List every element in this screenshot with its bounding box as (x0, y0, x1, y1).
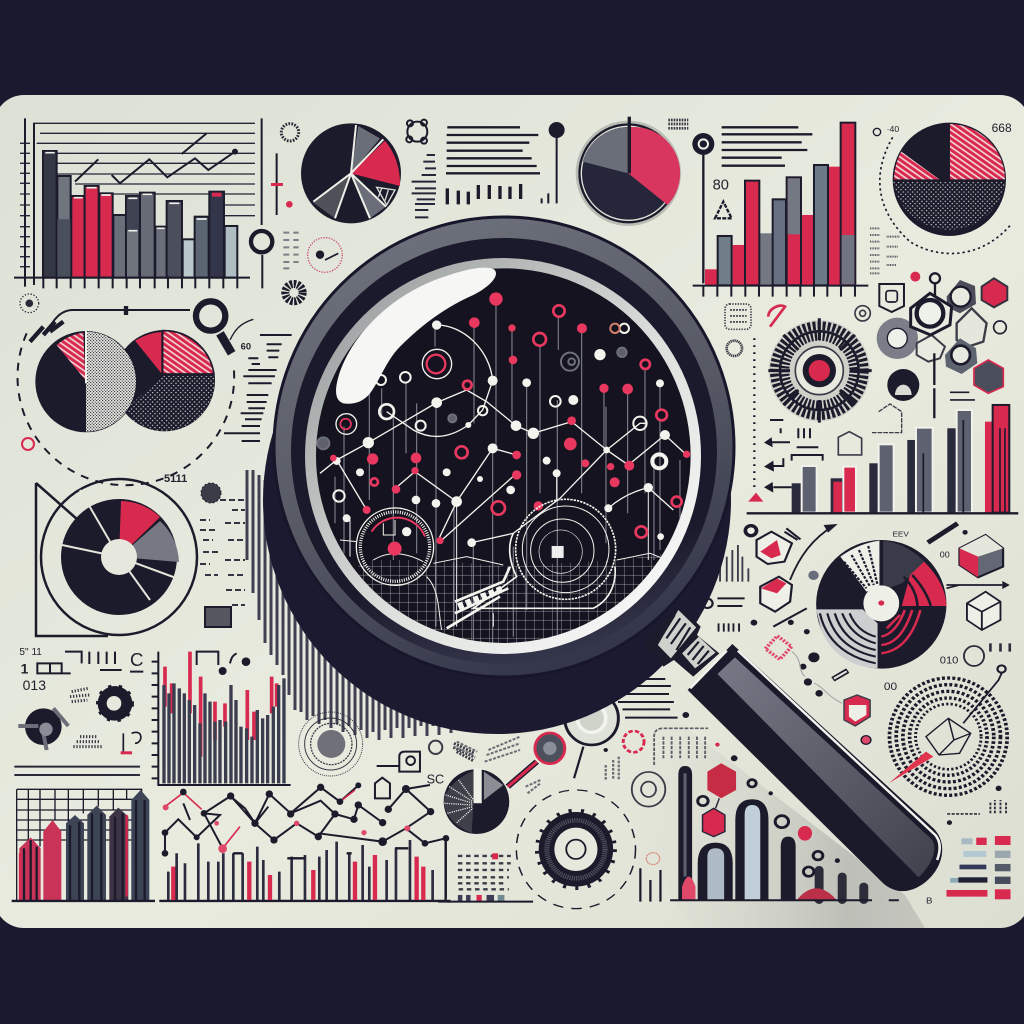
dashed circle (18, 333, 234, 485)
gear core (803, 354, 836, 387)
curve lower left (427, 577, 442, 630)
pie gray slice (351, 126, 380, 173)
small icons (375, 741, 442, 798)
white centre (863, 585, 899, 621)
pie: dial (576, 117, 681, 226)
right gauge (473, 499, 616, 608)
ringed pink nodes (371, 305, 682, 538)
base rule (12, 897, 451, 904)
double rule (14, 767, 140, 775)
pink circle (646, 853, 660, 865)
small label: 60 (241, 341, 251, 351)
list lines (446, 127, 540, 173)
small magnifier icon (196, 301, 253, 353)
pie lower-left gray (313, 173, 351, 218)
red diamond (748, 493, 763, 502)
gauge red arc (372, 518, 425, 537)
virus icon (285, 284, 303, 301)
pie notch (474, 768, 482, 803)
top-left marks (37, 652, 143, 673)
panel: top-left charts and pies (14, 118, 303, 485)
outline hex (957, 308, 987, 347)
red cube (959, 535, 1003, 577)
target rings (336, 349, 452, 434)
label 80: 80 (713, 177, 729, 193)
pie connector (50, 310, 190, 327)
pin (542, 122, 565, 203)
bar chart: monthly bars (43, 151, 237, 278)
red sector (135, 332, 161, 373)
axes (14, 118, 250, 288)
bar chart: lower right (747, 392, 1018, 513)
small red dot (715, 743, 720, 747)
lower left stripes (816, 609, 878, 668)
capsule bars (678, 763, 864, 900)
panel: lower-right details (438, 523, 1011, 909)
white rings (333, 324, 666, 502)
mini matrix (458, 856, 511, 889)
red connector fill (508, 762, 537, 787)
tall capsule inner (681, 773, 689, 877)
caption lines (950, 392, 975, 400)
connector node (30, 306, 126, 342)
dot (996, 786, 1002, 791)
pie hatched slice (377, 187, 395, 205)
dark spikes (164, 678, 284, 783)
small ring (994, 321, 1006, 334)
magnifier: white glass rim (305, 258, 701, 654)
labels: EEV (892, 530, 910, 539)
lens badge (565, 692, 618, 778)
icon: house two (872, 404, 902, 433)
table top right (668, 120, 688, 128)
capsule mid (698, 843, 733, 900)
dotted vertical (751, 338, 758, 490)
dashed arc (880, 137, 1011, 253)
labels top right (873, 121, 1012, 136)
tape marks (458, 588, 503, 607)
gray bars (802, 410, 972, 513)
dial red sector (628, 127, 680, 205)
red bars (833, 405, 1009, 513)
pink ring (861, 736, 871, 744)
legend blocks (946, 836, 1011, 899)
tiny text block (870, 228, 900, 273)
handle collar (643, 605, 719, 677)
main hole (917, 300, 943, 327)
handle gray strip (717, 657, 934, 877)
small round icon (20, 294, 39, 313)
stems (335, 300, 680, 643)
outline cube (967, 592, 1000, 630)
labels top right: ·40 (887, 124, 899, 134)
teardrop pin (930, 273, 940, 418)
tiny table (283, 233, 299, 268)
labels (884, 530, 959, 693)
pie lower (444, 768, 509, 834)
gear wheel (539, 812, 613, 887)
icon: house (838, 432, 862, 455)
red sector (902, 562, 946, 606)
dial gray sector (583, 127, 628, 173)
dots (603, 712, 840, 863)
network nodes (162, 782, 449, 857)
dotted red inner (317, 251, 338, 260)
dial pie (61, 499, 177, 615)
bottom right hex (974, 360, 1003, 393)
small diamonds (764, 437, 774, 493)
gear red (809, 360, 830, 381)
dotted lower sector (127, 376, 215, 431)
panel: lower-left charts (12, 647, 475, 901)
red bulb (682, 877, 695, 900)
main trend lines (320, 325, 687, 543)
gear dashed orbit (516, 790, 636, 909)
red hatch tile (765, 636, 792, 659)
needle (963, 672, 1002, 723)
gauge red node (388, 542, 402, 556)
base axis (693, 286, 868, 297)
top-left labels: C (130, 649, 143, 670)
icon: triangle (715, 202, 732, 218)
red sector inner (904, 575, 931, 606)
pin icon (692, 133, 714, 283)
tower red edge (20, 815, 127, 900)
slider line with ring (251, 118, 277, 288)
dark hex (947, 280, 976, 313)
pink nodes (330, 292, 690, 544)
red wedge (894, 152, 939, 179)
network dark lines (165, 785, 446, 898)
small dotted circle (201, 483, 221, 503)
bottom hex (945, 338, 977, 374)
pie left (35, 331, 137, 432)
scribbles (70, 688, 102, 747)
baseline (447, 900, 899, 902)
dotted half (86, 332, 136, 432)
icon: hex ring (406, 120, 427, 144)
icons above gear (725, 304, 870, 356)
spike chart (152, 652, 291, 785)
pie: right striped (893, 123, 1006, 236)
magnifier: lens shadow (263, 266, 731, 734)
small red dot (910, 272, 920, 282)
pie stripes (444, 771, 474, 833)
list lines centre (613, 679, 678, 718)
gray gear (877, 318, 918, 359)
red markers (271, 183, 293, 208)
handle ground shadow (610, 700, 925, 928)
pink nodes (163, 804, 410, 853)
lower contours (340, 540, 667, 565)
pill (833, 671, 848, 679)
trend end dot (232, 149, 238, 155)
needle ring (997, 665, 1006, 673)
red connector (508, 762, 537, 787)
dial dividers (62, 490, 176, 600)
magnifier: handle (643, 605, 942, 891)
base (747, 510, 1018, 517)
inner strokes (923, 420, 1005, 513)
concentric target (299, 712, 363, 776)
ring target (632, 772, 665, 807)
panel: top-right charts and icons (692, 121, 1018, 513)
red pin (123, 732, 141, 753)
grid floor (358, 554, 660, 643)
small dots (751, 530, 968, 697)
gear hole (887, 328, 907, 348)
gear spokes (768, 318, 872, 423)
lower right red lines (881, 610, 920, 653)
top right gray (883, 541, 926, 590)
hex connector (716, 798, 719, 808)
labels top right: 668 (992, 121, 1012, 135)
disc polygon (926, 718, 971, 755)
dotted half (893, 182, 1005, 230)
title lines (722, 127, 812, 166)
gear inner (566, 840, 586, 859)
wrench icon (18, 708, 68, 750)
left gauge (356, 508, 434, 585)
label B: B (926, 896, 932, 905)
red backing bars (705, 167, 840, 285)
handle body (688, 644, 942, 891)
column caps (233, 848, 408, 858)
outlined bars (718, 123, 855, 285)
dot two (947, 820, 952, 825)
small ticks (947, 800, 1006, 814)
gauge centre (552, 546, 564, 558)
small box (205, 607, 231, 627)
dial red (119, 501, 160, 557)
red base (121, 751, 132, 754)
dial ring (41, 479, 197, 635)
pill inner (834, 671, 847, 679)
pie: sliced (301, 123, 401, 223)
pie red slice (351, 141, 400, 186)
red lens badge (535, 733, 565, 764)
tower details (24, 800, 145, 900)
gear hatch (547, 820, 605, 878)
pie separators (313, 125, 386, 218)
gear rim (780, 331, 859, 410)
bar chart: right (693, 123, 868, 297)
tape strip (447, 567, 510, 628)
shaft hatch (682, 637, 716, 668)
arrow right (946, 585, 1002, 588)
red outline (22, 438, 34, 450)
disc pie (816, 540, 946, 669)
red spikes (165, 652, 277, 757)
tick marks (200, 500, 245, 605)
top-left labels: 013 (23, 677, 46, 693)
top-left labels: 5'' 11 (19, 647, 42, 658)
side list lines (224, 335, 292, 441)
lens glass (316, 268, 691, 643)
dial white ring (581, 126, 676, 221)
pie divider (83, 331, 89, 383)
white nodes (333, 320, 670, 547)
network red lines (165, 790, 355, 848)
bar caps (45, 153, 207, 231)
mini bars (447, 184, 521, 204)
hatching marks (453, 737, 619, 793)
grey node (808, 571, 819, 580)
red columns (173, 855, 423, 900)
dark ring icon (887, 369, 919, 401)
magnifier: inner dark ring (291, 238, 717, 664)
bracket triangle (36, 483, 108, 636)
lower outline hex (917, 335, 945, 362)
dotted badge (281, 124, 299, 141)
halftone disc (889, 665, 1007, 795)
labels: 00 (884, 681, 897, 693)
red dome (797, 888, 837, 900)
diamond tails (770, 420, 823, 487)
glass highlight (336, 268, 496, 404)
arrow curve (790, 525, 835, 580)
dial tick (624, 117, 634, 173)
dial centre (101, 539, 137, 575)
small rings (698, 780, 823, 876)
small dots (219, 657, 250, 675)
top-left stripes (840, 541, 879, 592)
grid chart (17, 789, 149, 900)
mini legend (458, 853, 504, 901)
shadow hatching (247, 470, 451, 740)
magnifier: outer ring (274, 217, 734, 677)
hex cluster (877, 273, 987, 418)
red glyph (623, 731, 644, 752)
gauge lines (373, 520, 423, 562)
ring with line (964, 643, 1010, 666)
label: 5111 (164, 473, 187, 485)
pie lower gray (351, 173, 386, 218)
post (438, 838, 660, 902)
arrow head (1002, 581, 1010, 589)
pie right (114, 330, 215, 431)
ticks list (412, 155, 436, 217)
red squiggle (768, 306, 785, 327)
dash bars (719, 623, 739, 632)
top-left labels (19, 647, 143, 693)
bottom hex hole (951, 346, 970, 364)
dial gray (119, 521, 179, 562)
gray bar tops (788, 178, 800, 234)
mini bars (714, 545, 748, 582)
gear icon (98, 686, 132, 721)
red needle (889, 752, 933, 783)
icon: shield inner (886, 291, 897, 302)
capsule tiny set (819, 870, 864, 900)
red circle (798, 826, 812, 841)
striped sector (163, 331, 214, 374)
grid (17, 789, 142, 900)
network chart (162, 782, 449, 898)
red hex (982, 278, 1007, 307)
towers (19, 790, 149, 900)
gray backing bar (760, 233, 773, 285)
collar hatch (658, 610, 696, 658)
lens content (316, 268, 700, 660)
shaft hatch lines (688, 642, 709, 664)
striped quadrant (950, 124, 1005, 179)
grey swirl (317, 348, 627, 449)
gear centre (795, 347, 843, 395)
white stems (350, 473, 648, 627)
red hexes (707, 763, 736, 798)
pill and line (702, 523, 958, 627)
trend line (75, 133, 235, 183)
dial dark (582, 127, 675, 220)
dotted red circle (308, 238, 342, 272)
dark columns (168, 840, 433, 900)
collar hatch lines (663, 615, 690, 650)
gear white (554, 828, 598, 871)
ring icon inner (895, 385, 912, 395)
main hex (911, 293, 952, 335)
red bar cap (212, 193, 221, 197)
labels: 00 (940, 550, 950, 560)
iso cube mid (760, 577, 792, 612)
box white (849, 705, 866, 722)
capsule tall (735, 799, 768, 900)
bar forest (168, 840, 433, 900)
dark bars (792, 428, 957, 513)
red box (844, 695, 870, 726)
handle white edge (690, 651, 940, 860)
dark hex hole (951, 287, 971, 307)
red wedge (57, 333, 85, 380)
pie gray (484, 772, 503, 800)
iso cube top (745, 526, 792, 564)
capsule small (781, 837, 796, 900)
head outline (473, 533, 615, 608)
red dot (878, 600, 884, 606)
stripe blob (453, 743, 475, 761)
label SC: SC (427, 772, 444, 786)
gear: radial (768, 318, 872, 423)
marks over spikes (197, 652, 237, 665)
capsule tall inner (745, 805, 760, 900)
icon: shield (879, 284, 904, 312)
axis (152, 652, 291, 785)
gear outer teeth (774, 326, 864, 416)
arrow tip (824, 524, 838, 533)
capsule mid inner (707, 848, 724, 900)
gear inner teeth (784, 336, 854, 406)
panel: left-middle dial (22, 438, 245, 636)
grid lines (20, 123, 255, 267)
top-left labels: 1 (21, 660, 29, 676)
comb table (654, 728, 708, 765)
labels: 010 (940, 655, 959, 666)
connector curves (792, 652, 842, 703)
panel: top-centre pies and list (281, 117, 688, 272)
tall capsule (678, 766, 692, 900)
